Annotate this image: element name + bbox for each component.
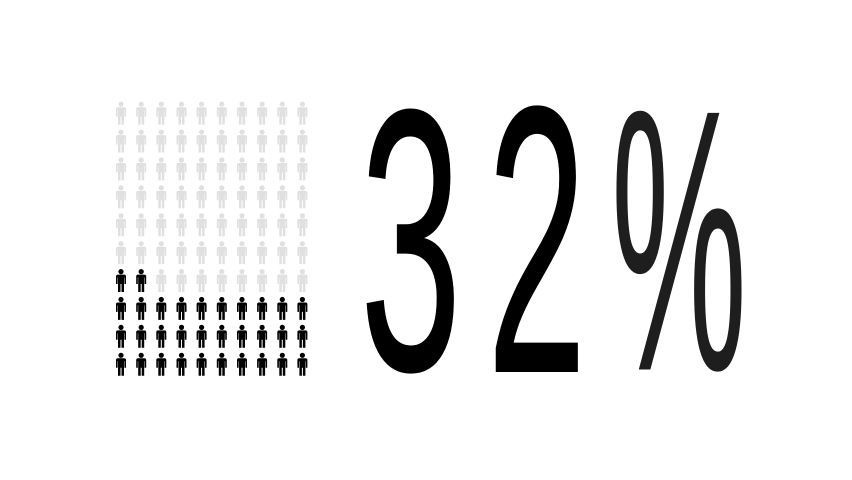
percent sign: % (611, 33, 747, 449)
digit 2: 2 (487, 29, 587, 453)
digit 3: 3 (360, 33, 462, 450)
grey people: remaining 68 (116, 102, 307, 292)
big percentage value (360, 29, 747, 453)
pictogram: 100 people grid (116, 102, 307, 376)
black people: highlighted 32 (116, 269, 307, 376)
